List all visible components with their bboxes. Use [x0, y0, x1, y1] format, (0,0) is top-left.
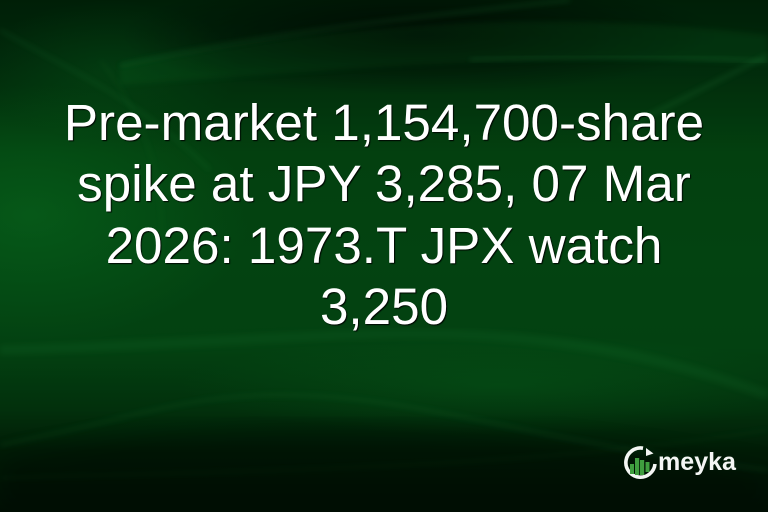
title: 3,250: [320, 278, 448, 335]
title: [64, 94, 704, 335]
wordmark: meyka: [658, 448, 737, 476]
title: 2026: 1973.T JPX watch: [106, 217, 662, 274]
logo: meyka: [624, 446, 737, 479]
icon: ring with bars: [626, 448, 655, 477]
title: spike at JPY 3,285, 07 Mar: [77, 155, 691, 212]
title: Pre-market 1,154,700-share: [64, 94, 704, 151]
